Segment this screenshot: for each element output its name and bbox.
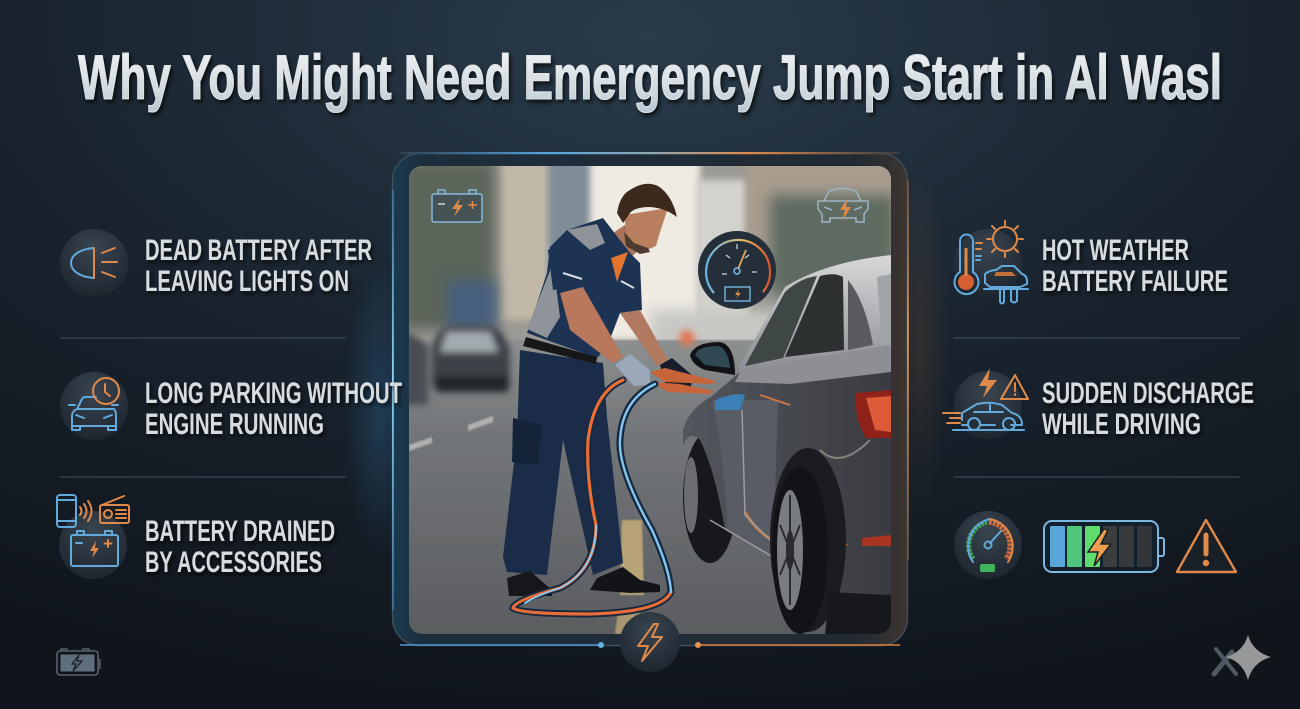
tail light xyxy=(856,390,891,438)
icon: warning triangle xyxy=(1177,520,1236,572)
body xyxy=(683,345,891,595)
road xyxy=(400,340,900,640)
trousers xyxy=(503,350,623,575)
panel: central photo frame xyxy=(344,152,950,672)
text: sudden discharge xyxy=(1042,377,1254,441)
icon: accessories and battery xyxy=(57,495,129,579)
photo: roadside jump start xyxy=(400,155,900,640)
silver car xyxy=(683,255,891,634)
shirt xyxy=(527,218,642,358)
side mirror xyxy=(690,342,735,375)
icon: parked car with clock xyxy=(60,372,128,440)
text: sudden discharge: WHILE DRIVING xyxy=(1042,408,1201,441)
head xyxy=(624,209,667,250)
text: battery drained xyxy=(145,515,335,579)
bottom connector lines xyxy=(400,642,900,648)
jumper clamps xyxy=(650,368,716,394)
icon: low battery xyxy=(1044,521,1164,572)
icon: car overlay xyxy=(818,188,868,222)
icon: dashboard gauge xyxy=(954,511,1022,579)
icon: sudden discharge xyxy=(943,368,1028,439)
front wheel xyxy=(683,438,732,563)
icon: hot weather xyxy=(954,221,1028,304)
text: dead battery xyxy=(145,234,372,298)
text: long parking: LONG PARKING WITHOUT xyxy=(145,377,402,410)
text: dead battery: LEAVING LIGHTS ON xyxy=(145,265,349,298)
icon: battery overlay xyxy=(432,190,482,222)
street background xyxy=(409,166,891,341)
neck xyxy=(614,225,637,256)
gloves xyxy=(615,354,650,386)
panel: right causes xyxy=(943,221,1254,579)
text: hot weather: HOT WEATHER xyxy=(1042,234,1189,267)
rear wheel xyxy=(770,448,846,632)
arms xyxy=(560,287,623,363)
icon: central lightning badge xyxy=(620,612,680,672)
text: dead battery: DEAD BATTERY AFTER xyxy=(145,234,372,267)
shoes xyxy=(507,571,552,596)
text: hot weather xyxy=(1042,234,1228,298)
icon: bottom-left battery watermark xyxy=(57,649,100,675)
text: long parking xyxy=(145,377,402,441)
reflections xyxy=(715,394,745,410)
icon: headlight xyxy=(60,229,128,297)
belt xyxy=(523,337,597,364)
mechanic xyxy=(503,184,716,596)
blurred parked cars xyxy=(405,326,695,405)
door seams xyxy=(710,410,775,557)
icon: gauge overlay xyxy=(698,231,776,309)
roof and pillars xyxy=(738,255,891,372)
text: battery drained: BY ACCESSORIES xyxy=(145,546,322,579)
panel: left causes xyxy=(57,229,402,579)
jumper cables xyxy=(513,380,671,614)
text: battery drained: BATTERY DRAINED xyxy=(145,515,335,548)
icon: bottom-right sparkle watermark xyxy=(1214,635,1271,680)
text: long parking: ENGINE RUNNING xyxy=(145,408,324,441)
